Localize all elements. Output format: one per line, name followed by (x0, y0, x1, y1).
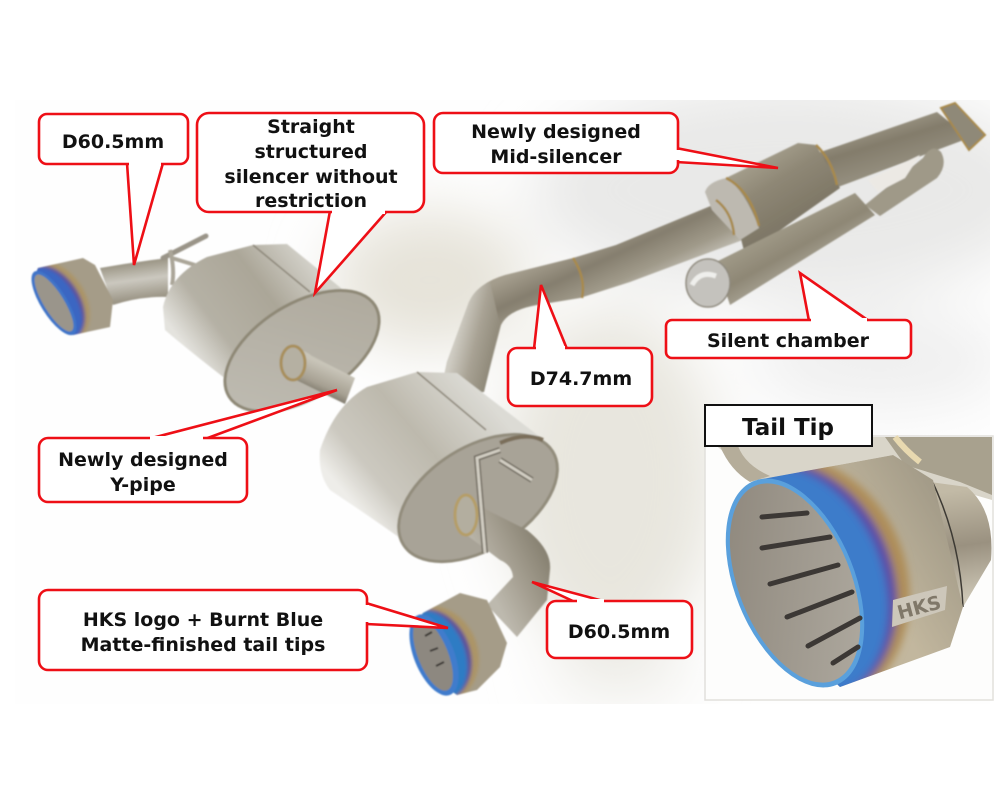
label: Tail Tip: Tail Tip (742, 415, 834, 441)
callout: silent chamber: Silent chamber (707, 330, 870, 352)
right hanger (477, 450, 532, 553)
callout: D60.5mm bottom right: D60.5mm (568, 621, 670, 643)
exhaust system photo (4, 103, 985, 718)
neck (930, 482, 992, 607)
callout: HKS logo tail tips: Matte-finished tail tips (81, 634, 325, 656)
callout: D60.5mm top left: D60.5mm (62, 131, 164, 153)
callout: newly designed mid-silencer: Newly designed (471, 121, 641, 143)
rear left silencer body (163, 244, 347, 405)
burnt blue tail tip (757, 455, 963, 687)
callout: newly designed Y-pipe: Newly designed (58, 449, 228, 471)
label: Tail Tip (705, 405, 872, 446)
centre pipe (440, 200, 748, 395)
callout: HKS logo tail tips: HKS logo + Burnt Blue (83, 609, 323, 631)
callout: HKS logo tail tips (39, 590, 448, 670)
callout: D74.7mm (508, 285, 652, 406)
U pipe (865, 149, 944, 216)
mid silencer (726, 143, 840, 255)
vent slots (762, 513, 860, 663)
flange (941, 103, 985, 150)
callout: straight structured silencer (197, 113, 424, 293)
hanger rod (163, 236, 206, 258)
callout: newly designed Y-pipe (39, 390, 337, 502)
callout: straight structured silencer: restriction (255, 190, 367, 212)
callout: newly designed Y-pipe: Y-pipe (109, 474, 176, 496)
rear left silencer end cap (204, 266, 400, 436)
left tail tip (36, 257, 114, 336)
callout: silent chamber (666, 273, 911, 358)
callout: D74.7mm: D74.7mm (530, 368, 632, 390)
main pipe behind mid-silencer (812, 112, 969, 190)
callout: straight structured silencer: structured (254, 141, 368, 163)
callout: straight structured silencer: silencer without (224, 166, 398, 188)
rear right silencer (320, 372, 540, 562)
callout: D60.5mm bottom right (532, 582, 692, 658)
rear right end cap (376, 408, 580, 588)
photo background: white cloth (314, 100, 990, 704)
inset: tail tip photo (704, 435, 994, 701)
callout: newly designed mid-silencer (434, 113, 778, 173)
HKS logo: HKS (895, 592, 944, 624)
right tail tip (421, 592, 508, 696)
left tail pipe (100, 258, 168, 305)
callout: newly designed mid-silencer: Mid-silencer (490, 146, 622, 168)
silent chamber (716, 193, 875, 305)
callout: straight structured silencer: Straight (267, 116, 355, 138)
right tail pipe (457, 505, 550, 637)
Y-pipe (285, 350, 355, 404)
callout: D60.5mm top left (39, 114, 188, 265)
